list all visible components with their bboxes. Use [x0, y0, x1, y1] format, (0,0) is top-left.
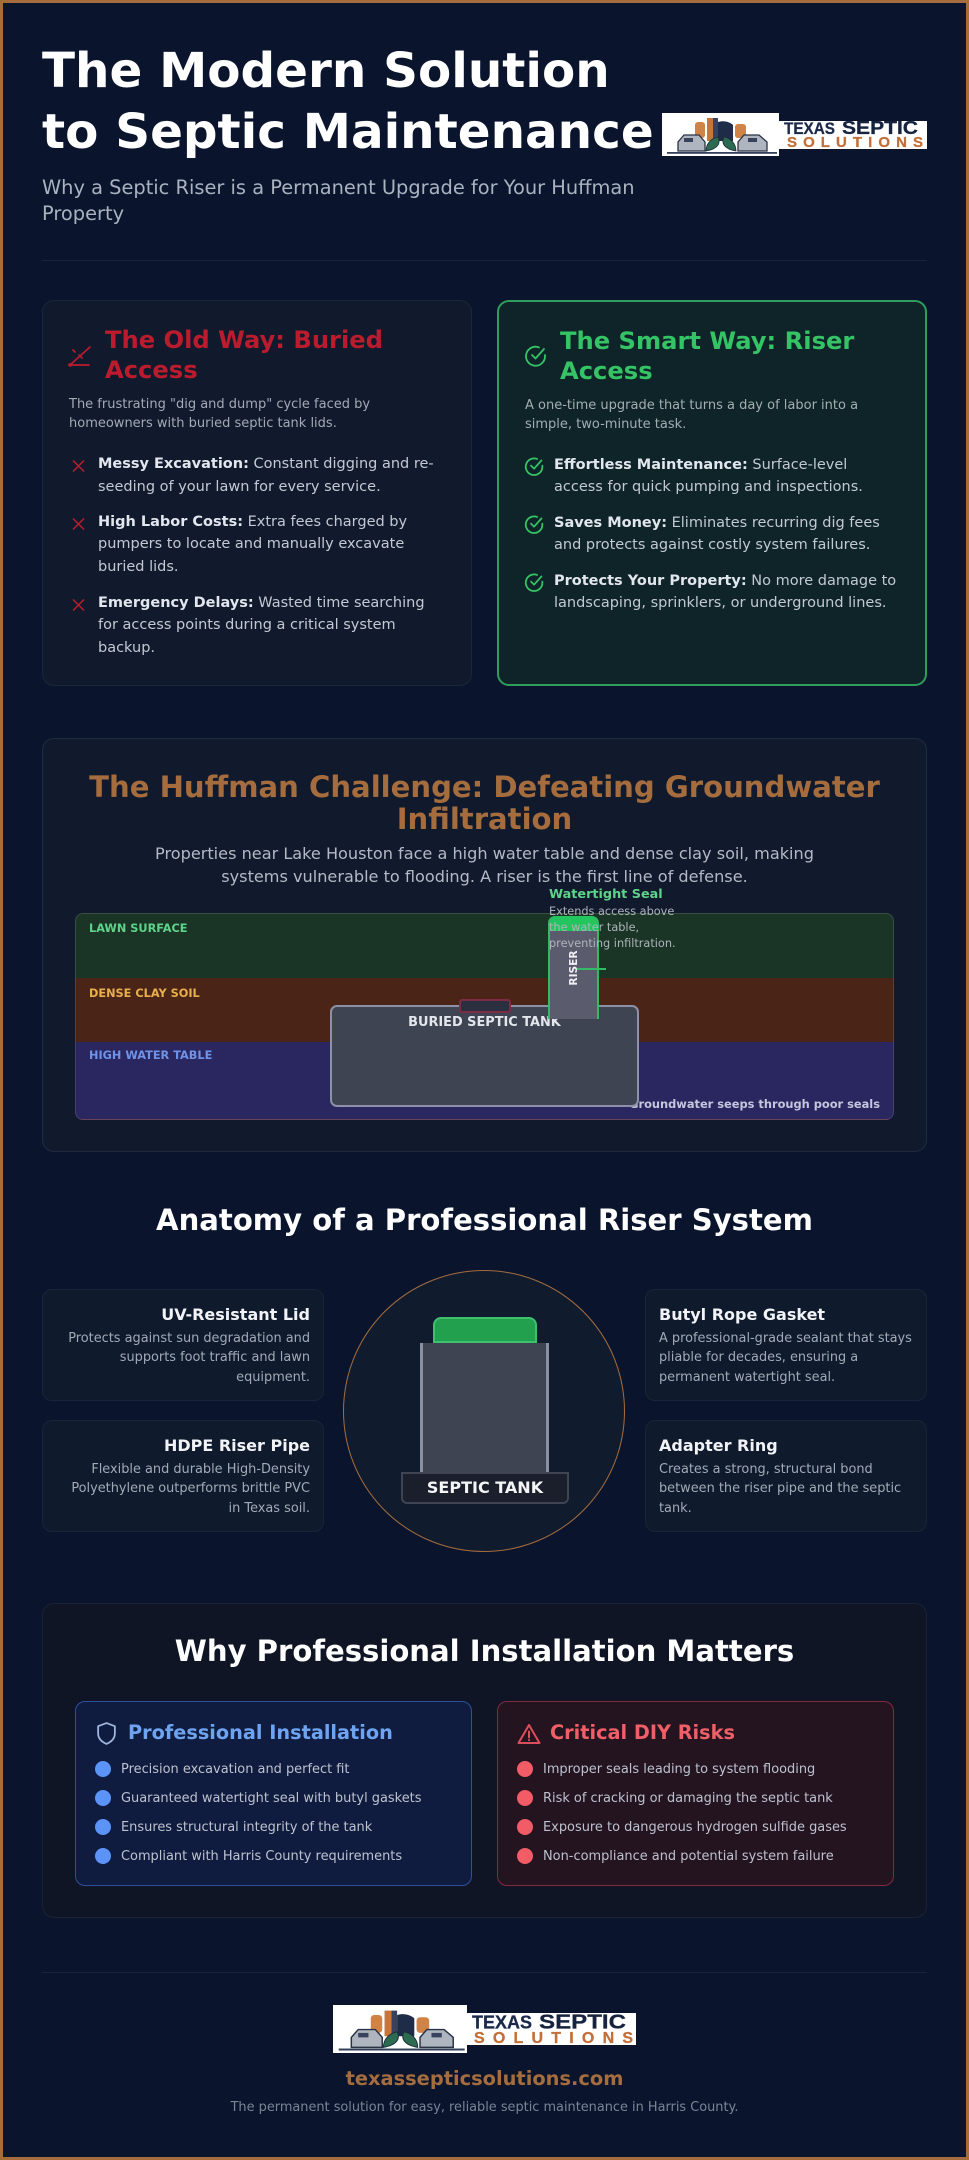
label: lawn surface: LAWN SURFACE [89, 922, 187, 935]
label: water table: HIGH WATER TABLE [89, 1049, 212, 1062]
anatomy card: UV lid: supports foot traffic and lawn [120, 1350, 310, 1365]
panel: installation [42, 1603, 927, 1918]
anatomy card: adapter: Adapter Ring [659, 1436, 778, 1455]
icon: shield [97, 1722, 116, 1745]
divider [42, 1972, 927, 1973]
panel: old way: High Labor Costs: Extra fees charged by [98, 514, 407, 530]
icon: check circle [525, 346, 546, 367]
diagram outline [75, 913, 894, 1120]
band: clay [75, 978, 894, 1042]
heading [105, 326, 383, 384]
panel: professional: Ensures structural integrity of the tank [121, 1820, 372, 1835]
panel: old way: buried lids. [98, 559, 179, 575]
panel: DIY risks: Non-compliance and potential system failure [543, 1849, 834, 1864]
callout description: Extends access above [549, 905, 674, 918]
section description: systems vulnerable to flooding. A riser is the first line of defense. [221, 867, 748, 886]
title [42, 43, 654, 160]
heading: Professional Installation [128, 1721, 393, 1744]
panel: smart way: Effortless Maintenance: Surface-level [554, 457, 847, 473]
panel: DIY risks: Exposure to dangerous hydrogen sulfide gases [543, 1820, 847, 1835]
description: The frustrating "dig and dump" cycle faced by [69, 397, 370, 412]
logo: footer: SEPTIC [539, 2010, 626, 2034]
section description [155, 844, 814, 886]
riser pointer line [577, 968, 606, 970]
tank label: SEPTIC TANK [427, 1478, 543, 1497]
icon: buried dig [68, 346, 91, 367]
panel: old way [42, 300, 472, 686]
title: The Modern Solution [42, 43, 610, 99]
icon: warning [518, 1724, 540, 1744]
heading [560, 327, 854, 384]
heading: Critical DIY Risks [550, 1721, 735, 1744]
anatomy card: HDPE [42, 1420, 324, 1532]
anatomy card: adapter: tank. [659, 1501, 692, 1516]
anatomy card: gasket: A professional-grade sealant that stays [659, 1331, 912, 1346]
anatomy card: adapter: Creates a strong, structural bond [659, 1462, 873, 1477]
anatomy card: HDPE: Polyethylene outperforms brittle PVC [71, 1481, 310, 1496]
diagram: buried tank [330, 1005, 639, 1107]
heading: huffman challenge: Infiltration [397, 802, 572, 836]
website url: texassepticsolutions.com [346, 2067, 623, 2090]
callout description: preventing infiltration. [549, 937, 676, 950]
anatomy card: gasket: Butyl Rope Gasket [659, 1305, 825, 1324]
panel: smart way: and protects against costly system failures. [554, 537, 870, 553]
heading: anatomy: Anatomy of a Professional Riser System [156, 1203, 813, 1237]
anatomy card: adapter: between the riser pipe and the septic [659, 1481, 901, 1496]
callout: watertight seal: Watertight Seal [549, 887, 663, 902]
description: simple, two-minute task. [525, 417, 686, 432]
list item: saves money [524, 516, 544, 534]
panel: professional: Compliant with Harris County requirements [121, 1849, 402, 1864]
panel: DIY risks: Improper seals leading to system flooding [543, 1762, 815, 1777]
anatomy card: gasket [645, 1289, 927, 1401]
anatomy card: gasket: pliable for decades, ensuring a [659, 1350, 858, 1365]
anatomy card: adapter [645, 1420, 927, 1532]
panel: professional [75, 1701, 472, 1886]
heading: Access [560, 356, 653, 384]
callout description [549, 905, 676, 950]
heading: installation: Why Professional Installation Matters [175, 1634, 794, 1668]
panel: old way: Messy Excavation: Constant digging and re- [98, 456, 434, 472]
callout description: the water table, [549, 921, 639, 934]
tank label: BURIED SEPTIC TANK [408, 1015, 561, 1030]
panel: smart way: Saves Money: Eliminates recurring dig fees [554, 515, 880, 531]
divider [42, 260, 927, 261]
panel: smart way: Protects Your Property: No more damage to [554, 573, 896, 589]
logo: footer [333, 2005, 636, 2053]
diagram: soil cross-section [75, 913, 894, 1120]
list item: emergency delays [72, 599, 84, 611]
description [525, 398, 858, 432]
heading: The Smart Way: Riser [560, 327, 854, 355]
panel: professional: Guaranteed watertight seal with butyl gaskets [121, 1791, 421, 1806]
anatomy card: UV lid [42, 1289, 324, 1401]
panel: DIY risks [497, 1701, 894, 1886]
riser label: RISER [568, 950, 580, 986]
panel: old way: for access points during a critical system [98, 617, 396, 633]
bullets [95, 1761, 111, 1777]
tank [401, 1472, 569, 1504]
heading: huffman challenge [89, 770, 880, 836]
panel: smart way: landscaping, sprinklers, or underground lines. [554, 595, 886, 611]
list item: protects [524, 574, 544, 592]
label: groundwater: Groundwater seeps through poor seals [629, 1097, 880, 1111]
label: clay soil: DENSE CLAY SOIL [89, 987, 200, 1000]
logo: footer: TEXAS [472, 2012, 532, 2032]
panel: smart way [497, 300, 927, 686]
panel: huffman challenge [42, 738, 927, 1152]
riser cap [548, 916, 599, 931]
section description: Properties near Lake Houston face a high water table and dense clay soil, making [155, 844, 814, 863]
anatomy card: HDPE: Flexible and durable High-Density [91, 1462, 310, 1477]
anatomy card: gasket: permanent watertight seal. [659, 1370, 835, 1385]
diagram: riser anatomy circle [343, 1270, 625, 1552]
band: water [75, 1042, 894, 1120]
logo: header: SEPTIC [842, 118, 918, 138]
panel: smart way: access for quick pumping and inspections. [554, 479, 863, 495]
anatomy card: UV lid: UV-Resistant Lid [161, 1305, 310, 1324]
description [68, 397, 370, 431]
anatomy card: HDPE: HDPE Riser Pipe [164, 1436, 310, 1455]
description: homeowners with buried septic tank lids. [69, 416, 337, 431]
subtitle: Why a Septic Riser is a Permanent Upgrade for Your Huffman [42, 176, 635, 199]
anatomy card: UV lid: Protects against sun degradation and [68, 1331, 310, 1346]
anatomy card: UV lid: equipment. [236, 1370, 310, 1385]
anatomy card: HDPE: in Texas soil. [229, 1501, 310, 1516]
heading: The Old Way: Buried [105, 326, 383, 354]
heading: Access [105, 356, 198, 384]
diagram: buried lid [459, 999, 511, 1013]
subtitle: Property [42, 202, 124, 225]
panel: old way: backup. [98, 640, 155, 656]
logo: header: SOLUTIONS [787, 134, 923, 151]
logo: header [662, 113, 927, 156]
panel: old way: seeding of your lawn for every service. [98, 479, 381, 495]
logo: footer: SOLUTIONS [474, 2030, 633, 2047]
subtitle [42, 176, 635, 225]
heading: huffman challenge: The Huffman Challenge: Defeating Groundwater [89, 770, 880, 804]
panel: DIY risks: Risk of cracking or damaging the septic tank [543, 1791, 833, 1806]
description: A one-time upgrade that turns a day of labor into a [525, 398, 858, 413]
panel: old way: pumpers to locate and manually excavate [98, 536, 404, 552]
bullets [517, 1761, 533, 1777]
list item: messy excavation [72, 460, 84, 472]
band: lawn [75, 913, 894, 978]
title: to Septic Maintenance [42, 104, 654, 160]
panel: old way: Emergency Delays: Wasted time searching [98, 595, 425, 611]
list item: effortless [524, 458, 544, 476]
lid [433, 1317, 537, 1343]
pipe [420, 1343, 549, 1473]
panel: professional: Precision excavation and perfect fit [121, 1762, 350, 1777]
logo: header: TEXAS [784, 120, 835, 138]
list item: high labor [72, 518, 84, 530]
tagline: The permanent solution for easy, reliable septic maintenance in Harris County. [231, 2100, 738, 2115]
diagram: riser [548, 916, 599, 1019]
